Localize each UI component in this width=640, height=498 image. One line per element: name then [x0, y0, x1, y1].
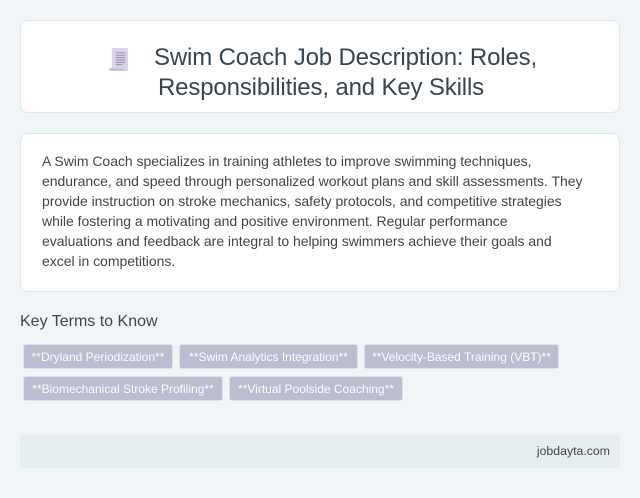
tag: biomechanical	[23, 376, 223, 401]
description text	[42, 153, 582, 269]
title card	[20, 20, 620, 113]
description text: provide instruction on stroke mechanics, safety protocols, and competitive strategies	[42, 193, 562, 209]
footer bar	[20, 434, 620, 468]
description text: excel in competitions.	[42, 253, 175, 269]
tag: dryland	[23, 344, 173, 369]
tag: biomechanical: **Biomechanical Stroke Profiling**	[32, 382, 214, 396]
tag: swim analytics	[179, 344, 358, 369]
footer text: jobdayta.com	[537, 444, 610, 458]
description text: endurance, and speed through personalized workout plans and skill assessments. They	[42, 173, 582, 189]
tags	[23, 344, 559, 401]
icon: document	[109, 48, 129, 71]
description text: while fostering a motivating and positive environment. Regular performance	[42, 213, 507, 229]
title text: Responsibilities, and Key Skills	[158, 74, 484, 101]
title text	[154, 44, 537, 101]
tag: virtual	[229, 376, 403, 401]
description card	[20, 133, 620, 292]
tag: swim analytics: **Swim Analytics Integration**	[189, 350, 348, 364]
tag: virtual: **Virtual Poolside Coaching**	[238, 382, 394, 396]
tag: dryland: **Dryland Periodization**	[32, 350, 164, 364]
title text: Swim Coach Job Description: Roles,	[154, 44, 537, 71]
description text: A Swim Coach specializes in training athletes to improve swimming techniques,	[42, 153, 531, 169]
heading: key terms: Key Terms to Know	[20, 313, 158, 330]
description text: evaluations and feedback are integral to helping swimmers achieve their goals and	[42, 233, 552, 249]
tag: vbt: **Velocity-Based Training (VBT)**	[372, 350, 551, 364]
tag: vbt	[364, 344, 559, 369]
